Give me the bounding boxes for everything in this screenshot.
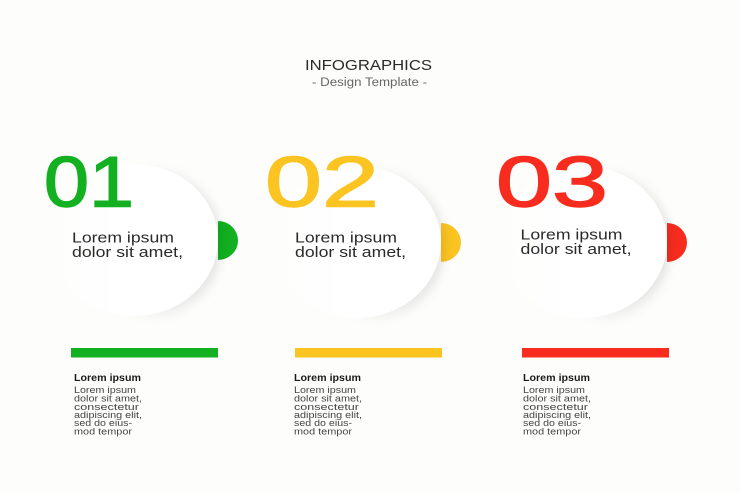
card text <box>295 230 406 261</box>
number 02: 02 <box>265 144 379 222</box>
card text <box>520 226 632 258</box>
card text <box>72 230 183 261</box>
title: INFOGRAPHICS <box>305 57 432 74</box>
title: - Design Template - <box>312 77 427 89</box>
detail text: consectetur <box>74 402 139 412</box>
panel: step 03 <box>496 144 687 436</box>
detail text: mod tempor <box>74 426 132 436</box>
detail text: consectetur <box>523 402 588 412</box>
green bar <box>71 348 218 358</box>
white circle card <box>273 166 441 318</box>
detail text: adipiscing elit, <box>294 410 362 420</box>
detail heading: Lorem ipsum <box>294 373 361 384</box>
card text: dolor sit amet, <box>520 241 632 258</box>
detail text <box>74 385 142 436</box>
detail text: sed do eius- <box>294 418 352 428</box>
detail text: dolor sit amet, <box>294 394 362 404</box>
detail text: Lorem ipsum <box>523 385 585 395</box>
card text: dolor sit amet, <box>295 244 406 261</box>
icon: green tab <box>218 221 238 260</box>
yellow bar <box>295 348 442 358</box>
card shadow <box>380 178 446 316</box>
detail text: dolor sit amet, <box>523 394 591 404</box>
detail heading: Lorem ipsum <box>523 373 590 384</box>
detail text: dolor sit amet, <box>74 394 142 404</box>
white circle card <box>499 166 667 318</box>
number 03: 03 <box>496 144 608 222</box>
card text: Lorem ipsum <box>72 230 174 246</box>
icon: red tab <box>667 223 687 262</box>
white circle card <box>50 164 218 316</box>
red bar <box>522 348 669 358</box>
detail text: consectetur <box>294 402 359 412</box>
number 01: 01 <box>44 144 134 222</box>
detail text <box>523 385 591 436</box>
card text: Lorem ipsum <box>295 230 397 246</box>
detail text: Lorem ipsum <box>294 385 356 395</box>
detail text <box>294 385 362 436</box>
detail text: sed do eius- <box>523 418 581 428</box>
panel: step 01 <box>44 144 238 436</box>
card text: dolor sit amet, <box>72 244 183 261</box>
detail text: mod tempor <box>294 426 352 436</box>
detail heading: Lorem ipsum <box>74 373 141 384</box>
icon: yellow tab <box>441 223 461 262</box>
title <box>305 57 432 89</box>
card shadow <box>606 178 672 316</box>
panel: step 02 <box>265 144 461 436</box>
detail text: sed do eius- <box>74 418 132 428</box>
card shadow <box>158 176 222 314</box>
detail text: mod tempor <box>523 426 581 436</box>
detail text: adipiscing elit, <box>523 410 591 420</box>
detail text: Lorem ipsum <box>74 385 136 395</box>
detail text: adipiscing elit, <box>74 410 142 420</box>
card text: Lorem ipsum <box>520 226 622 244</box>
